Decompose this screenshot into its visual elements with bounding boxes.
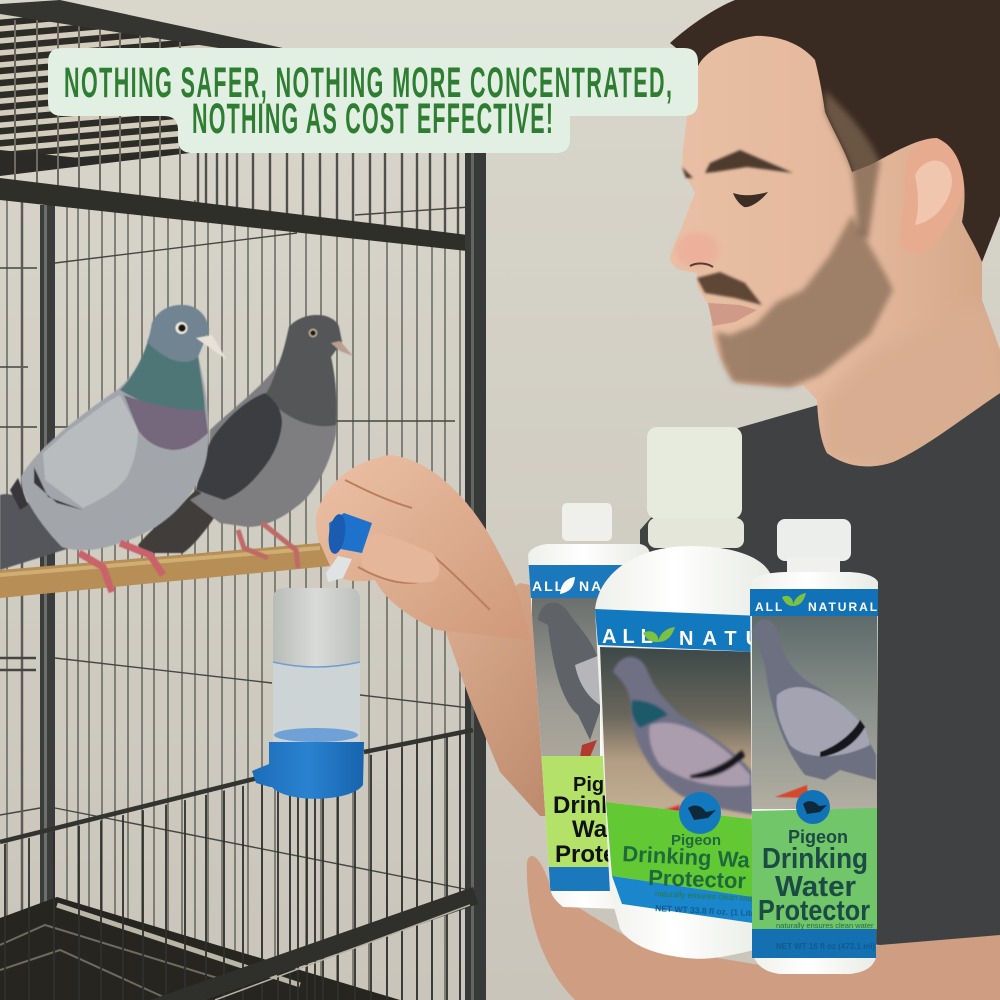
bottle: right: NET WT 16 fl oz (473.1 ml) (776, 942, 875, 951)
lips (708, 303, 757, 326)
head and neck (670, 30, 1000, 466)
pigeon left (0, 305, 227, 592)
back horizontal wires (0, 207, 470, 890)
blue band (750, 589, 878, 616)
green panel (541, 756, 609, 867)
green panel (606, 802, 760, 898)
body (750, 572, 878, 974)
cup (252, 742, 364, 799)
nostril (690, 263, 713, 267)
tube (273, 588, 360, 745)
bottle: right: Protector (758, 895, 870, 927)
breast (124, 395, 208, 450)
beak (196, 335, 227, 360)
photo pigeon (613, 657, 755, 820)
feet (79, 543, 163, 592)
label text: Pigeon (788, 827, 848, 847)
beard (716, 215, 893, 387)
cage floor (0, 897, 400, 1000)
man (640, 0, 1000, 945)
tail (138, 490, 224, 553)
bottle: back left: NA (579, 578, 603, 594)
neck (120, 305, 209, 416)
photo pigeon (752, 619, 876, 798)
hand with fingers (316, 455, 530, 640)
cap (562, 503, 612, 541)
body (595, 546, 770, 959)
banner (48, 48, 698, 153)
blue band (528, 565, 622, 598)
nose blush (675, 232, 719, 268)
thumb (361, 534, 439, 583)
bird badge (679, 792, 721, 834)
head (147, 305, 209, 362)
eye (733, 192, 768, 207)
bottle: center large: ALL (602, 626, 659, 648)
banner background (48, 48, 698, 153)
inner ear (915, 161, 952, 225)
blue cap with dropper (326, 513, 372, 582)
neck shading (817, 352, 1000, 466)
perch (0, 543, 330, 598)
photo (600, 647, 760, 820)
water feeder (252, 588, 364, 799)
bottle: right: ALL (755, 600, 784, 614)
bottle: back left: Prote (555, 841, 616, 868)
feet (238, 523, 298, 568)
photo (532, 598, 600, 756)
green panel (752, 808, 877, 929)
bottle: center large: Protector (648, 865, 747, 893)
bird badge (796, 790, 830, 824)
bottle: right: Water (775, 871, 856, 903)
bottle: center large: naturally ensures clean water (655, 889, 760, 903)
raised arm (445, 583, 610, 816)
headline line 1: NOTHING SAFER, NOTHING MORE CONCENTRATED, (64, 59, 672, 107)
photo (752, 616, 877, 809)
eyebrow (682, 150, 793, 178)
eye (310, 330, 316, 336)
leaf (643, 627, 675, 642)
label text: Pigeon (671, 832, 721, 849)
label text: Pigs (573, 774, 615, 796)
eye (176, 322, 188, 334)
wing bars (10, 467, 83, 510)
blue band (595, 609, 760, 652)
cap (647, 427, 742, 519)
body (190, 315, 342, 527)
moustache (697, 272, 762, 305)
wing (196, 393, 282, 500)
tail (0, 494, 70, 570)
cage roof grating (0, 12, 290, 172)
cap (777, 519, 851, 561)
bottle: center large: NATU (679, 628, 769, 650)
water (273, 662, 360, 742)
lower hand holding bottles (527, 856, 1000, 1000)
bottle: center large: Drinking Wa (622, 841, 751, 873)
lower front wires (4, 734, 461, 1000)
bottle: back left: Wa (572, 816, 608, 843)
sideburn fade (825, 90, 880, 240)
blue stripe (612, 876, 760, 924)
bottle: right: NATURAL (808, 600, 879, 614)
finger creases (345, 480, 490, 610)
wing (43, 395, 138, 508)
blue bottom band (752, 929, 876, 958)
bottle: center large: NET WT 33.8 fl oz. (1 Liter) (655, 903, 762, 919)
neck (265, 315, 342, 426)
body (21, 305, 209, 550)
shirt (640, 393, 1000, 945)
body (528, 544, 650, 910)
beak (331, 341, 353, 356)
bottle: right: naturally ensures clean water (776, 921, 874, 930)
bottle: back left: ALL (532, 578, 565, 594)
pigeon right (138, 315, 353, 568)
upper front wires (198, 150, 458, 240)
bottle: back left: Drink (553, 792, 615, 819)
headline line 2: NOTHING AS COST EFFECTIVE! (192, 95, 553, 143)
hair (670, 0, 1000, 262)
birdcage (0, 0, 486, 1000)
front horizontal rail (0, 730, 473, 842)
cage posts and rails (40, 205, 55, 905)
bottle: right: Drinking (762, 843, 868, 875)
leaf (782, 593, 806, 606)
bottle: right (750, 519, 879, 974)
bottle: center large (595, 427, 770, 959)
leaf (560, 577, 575, 594)
bottle: back left (528, 503, 653, 910)
back wires (7, 200, 460, 1000)
ear (900, 138, 966, 253)
